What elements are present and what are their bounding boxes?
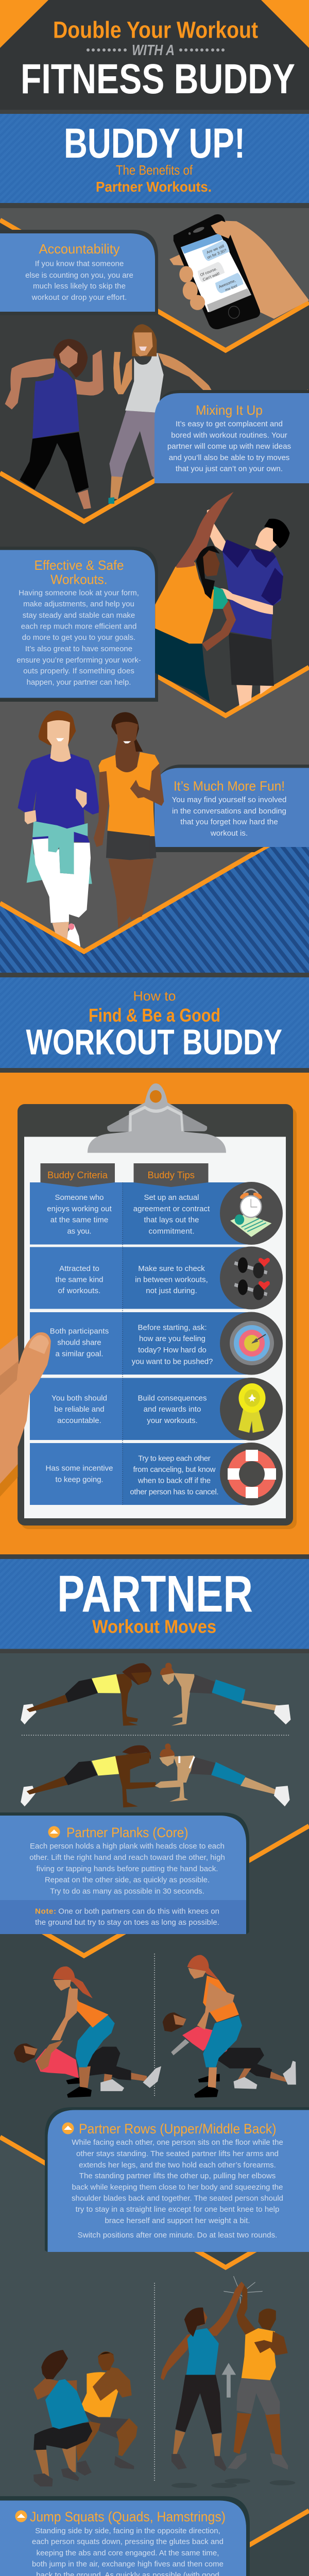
body text: bored with workout routines. Your — [171, 431, 287, 440]
row 4 text: and rewards into — [144, 1405, 201, 1414]
row 4 text: accountable. — [57, 1416, 101, 1425]
row 2 text: in between workouts, — [135, 1276, 208, 1284]
heading: how to: How to — [133, 988, 176, 1004]
header: title band — [0, 0, 309, 114]
illustration: partner rows lifted — [163, 1955, 296, 2098]
heading: workout moves: Workout Moves — [92, 1616, 216, 1637]
row 4 text — [52, 1394, 207, 1425]
row 3 text: today? How hard do — [138, 1346, 207, 1354]
clipboard — [0, 1083, 297, 1529]
banner: buddy up — [0, 114, 309, 208]
illustration: partner plank arms down — [21, 1663, 290, 1726]
heading: Mixing It Up — [196, 402, 263, 418]
heading: Partner Rows (Upper/Middle Back) — [79, 2121, 276, 2137]
row 4 text: your workouts. — [147, 1416, 198, 1425]
icon: hand holding phone with text messages: Awesome, — [218, 278, 236, 289]
heading: Workouts. — [50, 572, 108, 587]
row 4 text: be reliable and — [54, 1405, 105, 1414]
row 5 text: from canceling, but know — [133, 1465, 216, 1474]
row 2 text: not just during. — [146, 1286, 197, 1295]
row 1 text: that lays out the — [144, 1216, 199, 1224]
icon: hand holding phone with text messages: Of course. — [199, 266, 218, 277]
row 3 text: a similar goal. — [56, 1350, 103, 1358]
row 3 text: you want to be pushed? — [132, 1357, 213, 1366]
icon: hand holding phone with text messages: on for 3:30? — [207, 248, 227, 260]
body text: The standing partner lifts the other up, pulling her elbows — [79, 2172, 276, 2180]
row 2 text: the same kind — [56, 1276, 103, 1284]
row 2 text: Attracted to — [59, 1264, 99, 1273]
body text: that you just can’t on your own. — [176, 465, 283, 473]
icon: move marker — [62, 2123, 74, 2134]
body text: While facing each other, one person sits on the floor while the — [72, 2138, 283, 2147]
row 1 text: Someone who — [55, 1193, 104, 1202]
body text: extends her legs, and the two hold each other’s forearms. — [79, 2161, 276, 2170]
row 2 text: of workouts. — [58, 1286, 100, 1295]
panel: jump squats — [0, 2496, 250, 2576]
icon: hand holding clipboard — [0, 1332, 51, 1497]
body text: It’s easy to get complacent and — [176, 419, 283, 429]
banner subheading — [96, 162, 212, 195]
row 2 text — [56, 1264, 208, 1295]
row 3 text: should share — [57, 1338, 101, 1347]
illustration: jump squats high five — [161, 2276, 295, 2488]
body text: It’s also great to have someone — [25, 645, 132, 653]
icon: alarm clock and contract — [220, 1182, 283, 1245]
note: One or both partners can do this with knees on — [58, 1907, 219, 1916]
body text — [29, 1842, 225, 1896]
body text: Try to do as many as possible in 30 seconds. — [50, 1887, 204, 1896]
divider: jump squat poses — [154, 2283, 155, 2482]
body text — [25, 260, 133, 302]
row 3 text: how are you feeling — [139, 1334, 205, 1343]
row 5 text: other person has to cancel. — [130, 1488, 219, 1496]
row 5 text: to keep going. — [56, 1476, 103, 1484]
banner subheading: The Benefits of — [116, 162, 193, 178]
tab: buddy tips: Buddy Tips — [147, 1170, 195, 1180]
body text — [167, 419, 291, 473]
body text: fiving or tapping hands before putting the hand back. — [37, 1865, 218, 1873]
tab: buddy criteria — [40, 1163, 115, 1187]
tab: buddy tips — [134, 1163, 208, 1187]
table rows — [30, 1182, 251, 1505]
divider: rows poses — [154, 1954, 155, 2097]
icon: hand holding phone with text messages — [169, 214, 309, 329]
clipboard clip — [88, 1083, 226, 1153]
body text: do more to get you to your goals. — [22, 633, 135, 642]
illustration: jogger arm over the fun panel — [144, 755, 164, 859]
illustration: jump squats crouched — [33, 2350, 138, 2486]
icon: hand holding phone with text messages: Can't wait! — [202, 271, 220, 282]
body text: other stays standing. The seated partner lifts her arms and — [76, 2149, 279, 2158]
body text: and you’ll also be able to try moves — [169, 453, 289, 462]
note: the ground but try to stay on toes as long as possible. — [35, 1918, 219, 1927]
row 2 text: Make sure to check — [138, 1264, 205, 1273]
body text: Each person holds a high plank with heads close to each — [30, 1842, 225, 1851]
subtitle: with a: WITH A — [132, 42, 175, 59]
heading: Jump Squats (Quads, Hamstrings) — [30, 2509, 226, 2524]
heading: partner: PARTNER — [57, 1565, 253, 1623]
body text: workout is. — [210, 829, 248, 838]
panel: partner planks — [0, 1812, 249, 1934]
panel: accountability — [0, 230, 158, 315]
body text: Switch positions after one minute. Do at least two rounds. — [78, 2231, 277, 2240]
body text: brace herself and support her weight a bit. — [105, 2216, 250, 2225]
panel: effective and safe workouts — [0, 547, 158, 702]
workout moves section background — [0, 1653, 309, 2576]
title line: double your workout: Double Your Workout — [53, 16, 258, 43]
panel: partner rows — [45, 2107, 309, 2252]
heading: Effective & Safe — [34, 557, 124, 573]
body text — [16, 588, 141, 687]
banner heading: BUDDY UP! — [64, 120, 245, 167]
icon: hand holding phone with text messages: Are we still — [206, 244, 225, 255]
icon: life preserver — [220, 1443, 283, 1505]
section: orange clipboard background — [0, 1073, 309, 1554]
illustration: partner rows start — [14, 1967, 161, 2098]
body text: outs properly. If something does — [23, 667, 134, 675]
body text: in the conversations and bonding — [172, 807, 286, 816]
row 4 text: Build consequences — [138, 1394, 207, 1402]
icon: move marker — [48, 1826, 60, 1838]
icon: dumbbells with hearts — [220, 1247, 283, 1310]
body text: shoulder blades back and together. The seated person should — [72, 2194, 283, 2203]
note: Note: — [35, 1907, 56, 1916]
illustration: partner plank high five — [21, 1743, 290, 1807]
panel: it's much more fun — [151, 765, 309, 852]
benefits section background — [0, 208, 309, 977]
heading — [34, 557, 124, 587]
body text: both jump in the air, exchange high fives and then come — [32, 2560, 224, 2569]
body text: each rep much more efficient and — [21, 622, 136, 631]
divider: plank poses — [22, 1735, 290, 1736]
illustration: two women jogging — [18, 710, 164, 947]
row 1 text: as you. — [67, 1227, 92, 1235]
icon: hand holding phone with text messages: me too! — [225, 283, 238, 293]
body text — [172, 795, 286, 838]
illustration: trainer helping woman stretch — [155, 492, 290, 706]
row 5 text: Try to keep each other — [138, 1454, 211, 1463]
body text: try to stay in a straight line except for one bent knee to help — [76, 2205, 279, 2214]
body text — [72, 2138, 283, 2240]
banner: how to find and be a good workout buddy — [0, 977, 309, 1073]
heading: Partner Planks (Core) — [66, 1825, 188, 1840]
row 4 text: You both should — [52, 1394, 107, 1402]
icon: award ribbon — [220, 1378, 283, 1440]
heading: find and be a good: Find & Be a Good — [89, 1005, 220, 1026]
row 3 text: Before starting, ask: — [138, 1323, 207, 1332]
row 1 text: agreement or contract — [133, 1205, 210, 1213]
icon: move marker — [15, 2510, 27, 2522]
panel: mixing it up — [154, 390, 309, 483]
body text: each person squats down, pressing the glutes back and — [32, 2537, 224, 2546]
row 3 text — [50, 1323, 213, 1366]
heading: Accountability — [39, 241, 119, 257]
body text: back while keeping them close to her body and squeezing the — [72, 2183, 283, 2192]
row 3 text: Both participants — [50, 1327, 109, 1335]
body text: partner will come up with new ideas — [167, 442, 291, 451]
row 1 text — [47, 1193, 210, 1235]
note — [35, 1907, 219, 1927]
body text: Repeat on the other side, as quickly as possible. — [45, 1875, 210, 1885]
heading: It’s Much More Fun! — [174, 778, 285, 793]
body text — [31, 2527, 225, 2576]
tab: buddy criteria: Buddy Criteria — [47, 1170, 108, 1180]
row 5 text — [46, 1454, 219, 1496]
body text: If you know that someone — [35, 260, 124, 268]
row 1 text: Set up an actual — [144, 1193, 199, 1202]
body text: You may find yourself so involved — [172, 795, 286, 804]
row 5 text: Has some incentive — [46, 1464, 113, 1472]
body text: other. Lift the right hand and reach toward the other, high — [29, 1853, 225, 1862]
row 1 text: enjoys working out — [47, 1205, 112, 1213]
body text: Having someone look at your form, — [19, 588, 139, 598]
body text: much less likely to skip the — [33, 282, 126, 291]
body text: Standing side by side, facing in the opposite direction, — [35, 2527, 220, 2535]
banner subheading: Partner Workouts. — [96, 179, 212, 195]
body text: happen, your partner can help. — [27, 678, 131, 687]
body text: ensure you’re performing your work- — [16, 656, 141, 665]
row 5 text: when to back off if the — [138, 1477, 211, 1485]
body text: that you forget how hard the — [180, 818, 278, 826]
row 1 text: commitment. — [148, 1227, 195, 1235]
row 1 text: at the same time — [50, 1216, 108, 1224]
illustration: two women flexing — [5, 324, 214, 509]
body text: workout or drop your effort. — [31, 293, 127, 302]
body text: make adjustments, and help you — [23, 600, 134, 608]
subtitle: with a — [87, 42, 225, 59]
body text: keeping the abs and core engaged. At the same time, — [37, 2549, 219, 2557]
icon: target with arrow — [220, 1312, 283, 1375]
body text: stay steady and stable can make — [23, 611, 135, 620]
banner: partner workout moves — [0, 1554, 309, 1654]
body text: else is counting on you, you are — [25, 271, 133, 280]
